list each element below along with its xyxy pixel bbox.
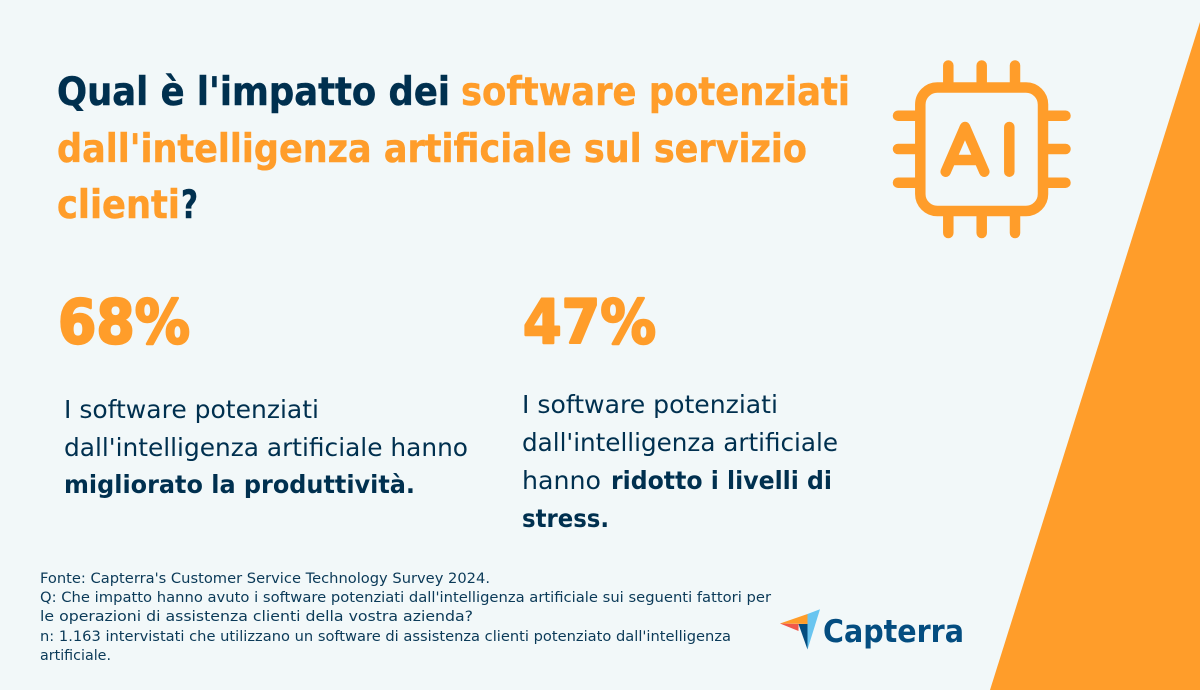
source footnote: Fonte: Capterra's Customer Service Technology Survey 2024.	[40, 571, 490, 587]
source footnote: n: 1.163 intervistati che utilizzano un software di assistenza clienti potenziato dall'intelligenza	[40, 629, 731, 645]
source footnote: le operazioni di assistenza clienti della vostra azienda?	[40, 609, 473, 625]
title: software potenziati	[461, 70, 850, 115]
source footnote	[40, 571, 771, 664]
logo: Capterra: Capterra	[823, 614, 964, 650]
statistic: 68%: 68%	[58, 287, 190, 358]
text block: productivity: I software potenziati	[64, 395, 319, 424]
source footnote: Q: Che impatto hanno avuto i software potenziati dall'intelligenza artificiale sui seguenti fattori per	[40, 590, 771, 606]
text block: productivity	[64, 395, 468, 499]
text block: stress: hanno	[522, 466, 601, 495]
title: dall'intelligenza artificiale sul servizio	[57, 127, 807, 172]
statistic: 47%: 47%	[523, 287, 656, 358]
text block: stress: dall'intelligenza artificiale	[522, 428, 838, 457]
icon: AI chip	[898, 66, 1066, 233]
orange diagonal corner shape	[990, 22, 1200, 690]
text block: stress: stress.	[522, 504, 609, 533]
title	[57, 70, 850, 228]
text block: stress: I software potenziati	[522, 390, 778, 419]
title: Qual è l'impatto dei	[57, 70, 450, 115]
title: clienti	[57, 183, 180, 228]
text block: productivity: dall'intelligenza artificiale hanno	[64, 433, 468, 462]
text block: stress: ridotto i livelli di	[611, 466, 832, 495]
text block: stress	[522, 390, 838, 533]
text block: productivity: migliorato la produttività.	[64, 470, 415, 499]
source footnote: artificiale.	[40, 648, 111, 664]
logo: Capterra	[780, 609, 964, 650]
title: ?	[181, 183, 198, 228]
